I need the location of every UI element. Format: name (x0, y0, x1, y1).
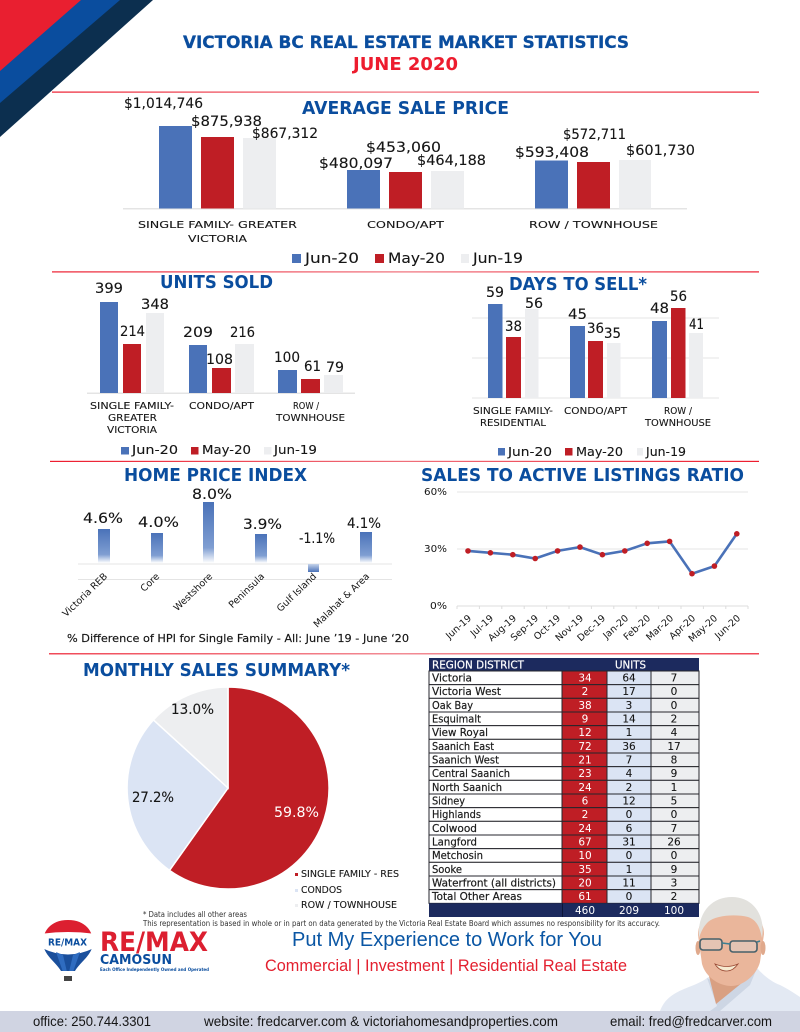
bars: single family: 348 (141, 297, 169, 313)
hpi axis labels (61, 571, 372, 630)
row: Saanich East: 72 (578, 741, 592, 753)
bars: condo: CONDO/APT (367, 220, 445, 231)
legend: May-20 (576, 444, 623, 459)
bars: single family: SINGLE FAMILY- GREATER (138, 220, 297, 231)
bars: row townhouse (644, 289, 711, 429)
bars: single family: VICTORIA (188, 234, 247, 245)
logo: RE/MAX Camosun wordmark: Each Office Independently Owned and Operated (100, 967, 209, 973)
row: Sidney: Sidney (432, 796, 465, 808)
row: Victoria West (429, 685, 699, 698)
row: Saanich East: 17 (667, 741, 681, 753)
line chart: May-20 (687, 613, 720, 645)
row: Colwood: Colwood (432, 823, 477, 835)
hpi bars (98, 502, 372, 572)
bars: condo: 108 (206, 352, 233, 368)
line chart: Feb-20 (622, 613, 653, 643)
row: Colwood: 24 (578, 823, 592, 835)
logo: RE/MAX Camosun wordmark: CAMOSUN (100, 953, 172, 968)
footer contact bar: email: fred@fredcarver.com (610, 1013, 772, 1029)
table header: REGION DISTRICT (432, 660, 525, 672)
legend: Jun-20 (131, 442, 178, 457)
pie legend: SINGLE FAMILY - RES (301, 869, 399, 880)
bars: single family: SINGLE FAMILY- (90, 401, 174, 412)
bars: single family: 38 (505, 319, 522, 335)
row: Langford: 26 (667, 836, 681, 848)
row: Oak Bay (429, 698, 699, 712)
tagline: Put My Experience to Work for You (292, 928, 602, 951)
legend (121, 442, 317, 457)
hpi axis labels: Peninsula (227, 571, 267, 611)
legend: Jun-19 (645, 444, 686, 459)
bars: row townhouse: 100 (274, 350, 300, 366)
row: Langford: 67 (578, 836, 592, 848)
row: Waterfront: Waterfront (all districts) (432, 878, 556, 890)
tagline (265, 928, 627, 975)
hpi axis labels: Victoria REB (61, 571, 110, 620)
row: Highlands: 0 (626, 809, 632, 821)
row: North Saanich: 2 (626, 782, 632, 794)
row: Victoria West: Victoria West (432, 686, 501, 698)
hpi values: 4.6% (83, 511, 123, 527)
bars: condo: $464,188 (417, 153, 486, 169)
row: North Saanich: 1 (671, 782, 677, 794)
row: Total Other Areas: 2 (671, 891, 677, 903)
line chart: Jul-19 (468, 613, 496, 640)
row: Highlands: 2 (582, 809, 588, 821)
legend: Jun-20 (507, 444, 552, 459)
row: Waterfront: 20 (578, 878, 592, 890)
pie legend (295, 869, 399, 911)
row: Colwood (429, 821, 699, 835)
row: Victoria: 7 (671, 672, 677, 684)
row: View Royal: View Royal (432, 727, 488, 739)
row: North Saanich: 24 (578, 782, 592, 794)
row: Sooke: 1 (626, 864, 632, 876)
row: Victoria (429, 671, 699, 685)
bars: row townhouse: $593,408 (515, 145, 589, 161)
row: Metchosin (429, 849, 699, 862)
heading: monthly sales summary: MONTHLY SALES SUMMARY* (83, 660, 351, 681)
bars: condo: 35 (604, 326, 621, 342)
bars: condo: 36 (587, 321, 604, 337)
table header: UNITS (615, 660, 646, 672)
row: Victoria: Victoria (432, 672, 472, 684)
hpi values: 4.0% (138, 515, 179, 531)
row: Saanich West: 7 (626, 754, 632, 766)
line chart (424, 487, 748, 645)
panel: monthly sales summary (83, 660, 399, 911)
row: Victoria West: 0 (671, 686, 677, 698)
panel: units sold (87, 272, 355, 457)
logo: RE/MAX balloon (44, 920, 92, 981)
line chart: Sep-19 (509, 613, 541, 644)
footnotes: * Data includes all other areas (143, 910, 247, 919)
row: Saanich West (429, 753, 699, 767)
bars: condo: $480,097 (319, 156, 393, 172)
bars: row townhouse: ROW / (293, 401, 320, 412)
heading: average sale price: AVERAGE SALE PRICE (302, 98, 509, 119)
table totals: 209 (619, 905, 639, 917)
row: Oak Bay: Oak Bay (432, 700, 473, 712)
bars: row townhouse: 41 (689, 317, 704, 333)
line chart: Oct-19 (532, 613, 563, 643)
row: Sidney: 6 (582, 796, 589, 808)
row: North Saanich: North Saanich (432, 782, 502, 794)
table totals: 460 (575, 905, 595, 917)
row: Central Saanich: Central Saanich (432, 768, 510, 780)
bars: condo: CONDO/APT (189, 401, 255, 412)
title: VICTORIA BC REAL ESTATE MARKET STATISTICS (183, 33, 629, 53)
bars: single family: 56 (525, 296, 543, 312)
row: Total Other Areas (429, 890, 699, 903)
bars: condo: CONDO/APT (564, 406, 628, 417)
title: JUNE 2020 (351, 54, 458, 75)
row: Saanich West: 21 (578, 754, 592, 766)
row: Saanich East (429, 739, 699, 753)
row: Metchosin: 10 (578, 850, 592, 862)
row: Saanich West: 8 (671, 754, 677, 766)
bars: single family: 214 (120, 324, 145, 340)
table totals (429, 903, 699, 917)
line chart: Aug-19 (486, 613, 519, 644)
row: Sidney: 12 (622, 796, 636, 808)
bars: row townhouse: TOWNHOUSE (275, 413, 345, 424)
line chart: Nov-19 (554, 613, 586, 644)
row: Central Saanich: 9 (671, 768, 677, 780)
hpi axis labels: Core (139, 571, 162, 594)
bars: single family (473, 285, 553, 429)
hpi values: -1.1% (299, 531, 335, 547)
row: Metchosin: 0 (671, 850, 677, 862)
line chart: Mar-20 (644, 613, 676, 643)
bars: condo: 209 (183, 325, 213, 341)
bars: row townhouse: ROW / (664, 406, 693, 417)
panel: days to sell (472, 274, 719, 459)
footer contact bar: website: fredcarver.com & victoriahomesandproperties.com (203, 1013, 558, 1029)
bars: condo (564, 307, 628, 417)
bars: row townhouse: 48 (650, 301, 669, 317)
title (183, 33, 629, 75)
row: Highlands: Highlands (432, 809, 481, 821)
bars: row townhouse: $572,711 (563, 127, 626, 143)
row: Langford (429, 835, 699, 849)
table totals: 100 (664, 905, 684, 917)
pie chart: 59.8% (274, 805, 319, 821)
table header (429, 658, 699, 672)
hpi axis labels: Gulf Island (275, 571, 319, 614)
legend (498, 444, 686, 459)
heading: home price index: HOME PRICE INDEX (124, 465, 307, 486)
bars: condo (183, 325, 255, 412)
bars: row townhouse (274, 350, 345, 424)
line chart: Dec-19 (575, 613, 608, 644)
line chart: 60% (424, 487, 447, 498)
footnotes: This representation is based in whole or in part on data generated by the Victoria Real Estate Board which assumes no responsibility for its accuracy. (142, 919, 660, 928)
hpi caption: % Difference of HPI for Single Family - All: June ’19 - June ‘20 (67, 633, 409, 645)
row: Victoria: 64 (622, 672, 636, 684)
bars: single family (124, 96, 318, 245)
row: Waterfront (429, 876, 699, 890)
row: Waterfront: 11 (622, 878, 636, 890)
hpi values: 3.9% (243, 517, 282, 533)
decorative corner stripes (0, 0, 153, 137)
row: Waterfront: 3 (671, 878, 677, 890)
footnotes (142, 910, 660, 928)
hpi values: 8.0% (192, 487, 232, 503)
legend: Jun-20 (304, 251, 359, 267)
panel: sales to active listings ratio (421, 465, 748, 645)
bars: condo: $453,060 (366, 140, 441, 156)
row: Oak Bay: 0 (671, 700, 677, 712)
bars: single family: GREATER (108, 413, 157, 424)
row: Central Saanich: 23 (578, 768, 592, 780)
row: Esquimalt: 2 (671, 714, 677, 726)
legend: Jun-19 (472, 251, 523, 267)
row: Saanich East: Saanich East (432, 741, 494, 753)
hpi values: 4.1% (347, 516, 381, 532)
heading: ratio: SALES TO ACTIVE LISTINGS RATIO (421, 465, 744, 486)
row: Victoria: 34 (578, 672, 592, 684)
pie chart: 27.2% (132, 790, 174, 806)
pie chart (127, 687, 329, 889)
bars: single family: $1,014,746 (124, 96, 203, 112)
hpi axis labels: Westshore (172, 571, 215, 614)
row: Sidney (429, 794, 699, 808)
bars: condo: 216 (230, 325, 255, 341)
row: Victoria West: 2 (582, 686, 588, 698)
bars: row townhouse (515, 127, 695, 231)
bars: condo: 45 (568, 307, 587, 323)
row: Metchosin: 0 (626, 850, 632, 862)
bars: single family: RESIDENTIAL (480, 418, 546, 429)
panel: average sale price (123, 96, 695, 267)
row: View Royal: 1 (626, 727, 632, 739)
row: Oak Bay: 3 (626, 700, 632, 712)
pie legend: ROW / TOWNHOUSE (301, 900, 397, 911)
bars: single family: VICTORIA (107, 425, 157, 436)
row: Sooke: Sooke (432, 864, 462, 876)
row: Highlands (429, 808, 699, 821)
bars: row townhouse: 56 (670, 289, 687, 305)
bars: condo (319, 140, 486, 231)
row: Saanich West: Saanich West (432, 754, 499, 766)
row: Colwood: 6 (626, 823, 633, 835)
heading: days to sell: DAYS TO SELL* (509, 274, 648, 295)
row: Sidney: 5 (671, 796, 677, 808)
bars: single family (90, 281, 174, 436)
table: region district units (429, 658, 699, 917)
bars: row townhouse: 61 (304, 359, 321, 375)
line chart: Jun-20 (712, 613, 743, 642)
row: Esquimalt: 9 (582, 714, 588, 726)
line chart: Jan-20 (600, 613, 631, 642)
hpi values (83, 487, 381, 547)
panel: home price index (61, 465, 409, 645)
row: Langford: 31 (622, 836, 636, 848)
pie legend: CONDOS (301, 885, 342, 896)
bars: single family: $867,312 (252, 126, 318, 142)
footer contact bar (0, 1011, 800, 1032)
logo: RE/MAX Camosun wordmark: RE/MAX (100, 927, 208, 958)
portrait: agent (660, 897, 800, 1011)
logo: RE/MAX balloon: RE/MAX (48, 938, 88, 948)
heading: units sold: UNITS SOLD (160, 272, 273, 293)
row: Total Other Areas: Total Other Areas (431, 891, 522, 903)
row: Colwood: 7 (671, 823, 677, 835)
legend: May-20 (388, 251, 445, 267)
row: Esquimalt (429, 712, 699, 726)
row: View Royal: 12 (578, 727, 592, 739)
row: North Saanich (429, 780, 699, 794)
line chart: Apr-20 (667, 613, 698, 642)
row: Esquimalt: Esquimalt (432, 714, 481, 726)
row: Central Saanich: 4 (626, 768, 633, 780)
bars: row townhouse: 79 (326, 360, 344, 376)
tagline: Commercial | Investment | Residential Real Estate (265, 957, 627, 975)
row: Esquimalt: 14 (622, 714, 636, 726)
row: Langford: Langford (432, 836, 477, 848)
row: View Royal: 4 (671, 727, 678, 739)
row: Sooke: 35 (578, 864, 592, 876)
footer contact bar: office: 250.744.3301 (33, 1013, 151, 1029)
hpi axis labels: Malahat & Area (312, 571, 372, 630)
row: Total Other Areas: 0 (626, 891, 632, 903)
row: Oak Bay: 38 (578, 700, 592, 712)
pie chart: 13.0% (171, 702, 214, 718)
row: Saanich East: 36 (622, 741, 636, 753)
row: View Royal (429, 726, 699, 739)
row: Metchosin: Metchosin (432, 850, 483, 862)
line chart: Jun-19 (443, 613, 474, 642)
bars: row townhouse: TOWNHOUSE (644, 418, 711, 429)
row: Highlands: 0 (671, 809, 677, 821)
row: Sooke: 9 (671, 864, 677, 876)
legend: Jun-19 (273, 442, 317, 457)
bars: single family: SINGLE FAMILY- (473, 406, 553, 417)
bars: single family: 59 (486, 285, 504, 301)
legend (292, 251, 523, 267)
line chart: 0% (430, 601, 447, 612)
legend: May-20 (202, 442, 251, 457)
row: Victoria West: 17 (622, 686, 636, 698)
row: Central Saanich (429, 767, 699, 780)
logo: RE/MAX Camosun wordmark (100, 927, 209, 973)
bars: single family: $875,938 (191, 114, 262, 130)
row: Total Other Areas: 61 (578, 891, 592, 903)
bars: single family: 399 (95, 281, 123, 297)
row: Sooke (429, 862, 699, 876)
line chart: 30% (424, 544, 447, 555)
bars: row townhouse: ROW / TOWNHOUSE (529, 220, 658, 231)
bars: row townhouse: $601,730 (626, 143, 695, 159)
